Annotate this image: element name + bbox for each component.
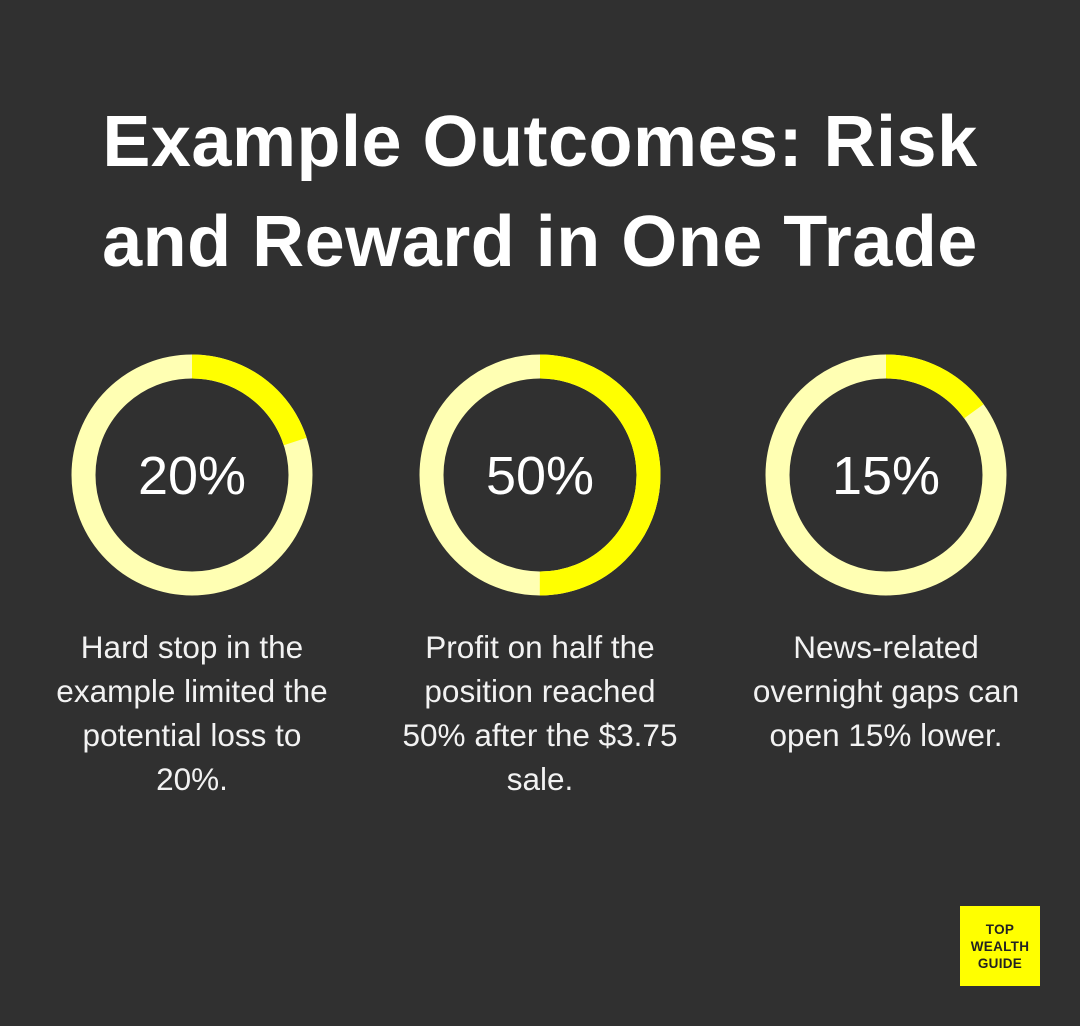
text: overnight gaps description: overnight gaps can bbox=[753, 673, 1019, 709]
text: overnight gaps description: News-related bbox=[793, 629, 979, 665]
text: overnight gaps description bbox=[753, 629, 1019, 753]
logo: Top Wealth Guide bbox=[960, 906, 1040, 986]
title: Example Outcomes: Risk bbox=[102, 102, 978, 182]
donut chart: 20%: 20% bbox=[138, 446, 246, 506]
title: and Reward in One Trade bbox=[102, 202, 978, 282]
logo: Top Wealth Guide: GUIDE bbox=[978, 956, 1022, 970]
text: hard stop description bbox=[56, 629, 328, 797]
text: profit description: sale. bbox=[507, 761, 573, 797]
text: hard stop description: Hard stop in the bbox=[81, 629, 303, 665]
donut chart: 20% bbox=[72, 354, 312, 596]
logo: Top Wealth Guide: WEALTH bbox=[971, 938, 1029, 954]
text: profit description: 50% after the $3.75 bbox=[403, 717, 677, 753]
text: hard stop description: 20%. bbox=[156, 761, 228, 797]
donut chart: 50%: 50% bbox=[486, 446, 594, 506]
title bbox=[102, 102, 978, 282]
donut chart: 15% bbox=[766, 354, 1006, 596]
donut chart: 15%: 15% bbox=[832, 446, 940, 506]
text: hard stop description: example limited the bbox=[56, 673, 328, 709]
text: hard stop description: potential loss to bbox=[83, 717, 301, 753]
donut chart: 50% bbox=[420, 354, 660, 596]
text: profit description: Profit on half the bbox=[425, 629, 655, 665]
text: overnight gaps description: open 15% lower. bbox=[770, 717, 1002, 753]
logo: Top Wealth Guide: TOP bbox=[986, 922, 1014, 936]
text: profit description bbox=[403, 629, 677, 797]
text: profit description: position reached bbox=[424, 673, 656, 709]
